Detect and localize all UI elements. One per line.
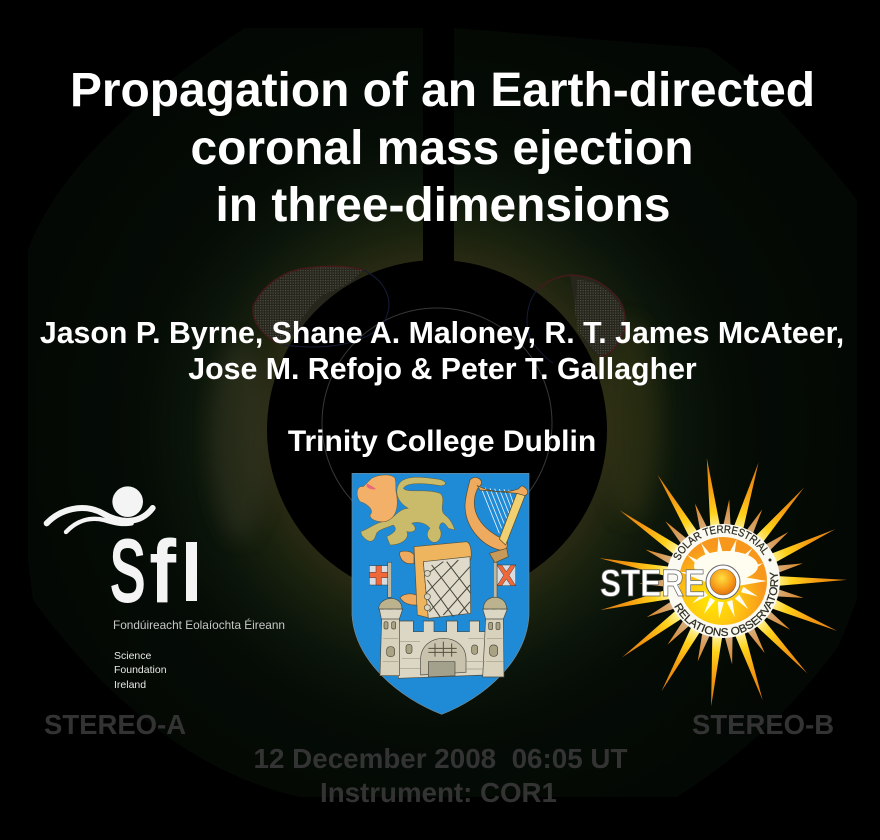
icon: castle (379, 597, 507, 678)
logo: Science Foundation Ireland (47, 486, 285, 691)
sun ring (666, 524, 780, 638)
title: coronal mass ejection (190, 122, 694, 175)
affiliation: Trinity College Dublin (288, 425, 596, 458)
sun short rays (639, 499, 804, 665)
sun ring text: bottom: RELATIONS OBSERVATORY (674, 572, 778, 636)
icon: right flag (493, 562, 516, 597)
sfi Irish name: Fondúireacht Eolaíochta Éireann (113, 617, 285, 632)
icon: harp (465, 478, 528, 563)
CME front: right (527, 275, 625, 363)
logo: STEREO sunburst (600, 458, 846, 706)
sfi English name: Foundation (114, 664, 167, 676)
shield (352, 473, 529, 714)
sun ring text: top: SOLAR TERRESTRIAL (674, 525, 768, 560)
sfi English name: Ireland (114, 679, 146, 691)
CME front: left (253, 266, 389, 347)
label: STEREO-A: STEREO-A (44, 709, 186, 740)
authors (40, 317, 844, 386)
sfi wordmark (110, 499, 197, 626)
icon: sfi sun and waves (47, 486, 153, 532)
STEREO orb (706, 565, 740, 599)
sun disc (679, 537, 767, 625)
sun long rays (598, 457, 847, 707)
title: Propagation of an Earth-directed (70, 64, 815, 117)
logo: Trinity College Dublin shield (352, 473, 529, 714)
label: instrument: Instrument: COR1 (320, 777, 557, 808)
sfi English name: Science (114, 650, 152, 662)
sfi wordmark: s (110, 499, 146, 626)
icon: book (399, 542, 471, 618)
STEREO wordmark: STERE (600, 563, 705, 605)
icon: lion (357, 475, 455, 545)
authors: Jason P. Byrne, Shane A. Maloney, R. T. James McAteer, (40, 317, 844, 350)
title: in three-dimensions (215, 179, 671, 232)
title (70, 64, 815, 232)
sfi English name (114, 650, 167, 691)
sfi wordmark: f (151, 525, 175, 620)
label: date and time: 12 December 2008 06:05 UT (254, 743, 627, 774)
authors: Jose M. Refojo & Peter T. Gallagher (188, 353, 697, 386)
sun ring dot (768, 558, 772, 562)
icon: left flag (369, 562, 392, 597)
label: STEREO-B: STEREO-B (692, 709, 834, 740)
